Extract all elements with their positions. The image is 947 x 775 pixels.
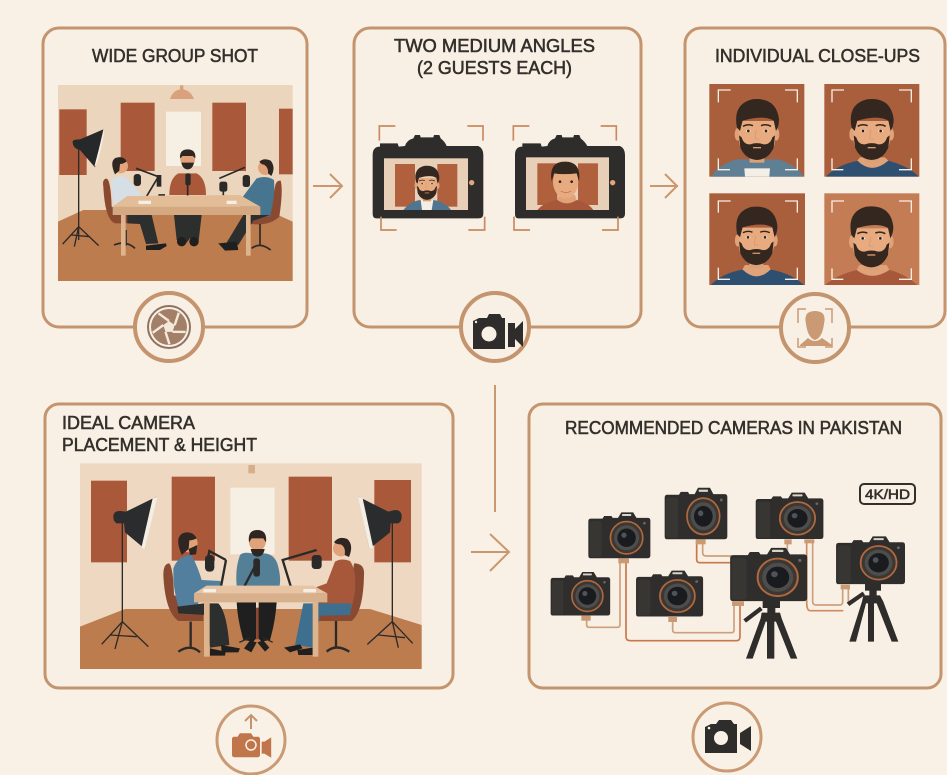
tripod: right [847,584,898,642]
panel: recommended cameras [529,404,941,688]
panel: camera placement and height [45,404,453,688]
camera: main on tripod [730,548,807,601]
panel: individual close-ups [685,28,945,327]
camera: top centre [665,488,727,539]
illustration: ideal placement scene [80,463,422,669]
illustration: wide studio scene [58,85,293,281]
heading: ideal camera placement [62,413,257,455]
icon: placement badge [217,706,285,774]
icon: camera and video badge [461,293,529,361]
icon: camera badge [693,703,761,771]
icon: aperture badge [135,293,203,361]
panel: wide group shot [43,28,307,327]
camera: right on tripod [836,536,905,584]
camera: lower centre [636,571,703,617]
badge: 4K/HD [860,484,915,504]
connector line and arrow [471,385,509,571]
heading: recommended cameras in Pakistan: RECOMMENDED CAMERAS IN PAKISTAN [565,418,902,438]
camera network diagram [551,488,905,659]
heading: two medium angles: TWO MEDIUM ANGLES [394,36,595,56]
portraits grid [709,84,919,285]
heading: individual close-ups: INDIVIDUAL CLOSE-UPS [715,46,920,66]
heading: ideal camera placement: IDEAL CAMERA [62,413,195,433]
badge: 4K/HD: 4K/HD [865,486,910,502]
heading: two medium angles: (2 GUESTS EACH) [417,58,572,78]
illustration: two camera viewfinders [373,126,625,230]
heading: ideal camera placement: PLACEMENT & HEIGHT [62,435,257,455]
camera: upper left [588,512,650,558]
icon: face framing badge [781,294,849,362]
heading: wide group shot: WIDE GROUP SHOT [92,46,258,66]
tripod: main [743,601,797,659]
camera: top right [756,493,823,539]
arrow: panel one to two [313,174,342,198]
heading: two medium angles [394,36,595,78]
arrow: panel two to three [650,174,678,198]
panel: two medium angles [354,28,641,327]
camera: far left [551,572,610,615]
